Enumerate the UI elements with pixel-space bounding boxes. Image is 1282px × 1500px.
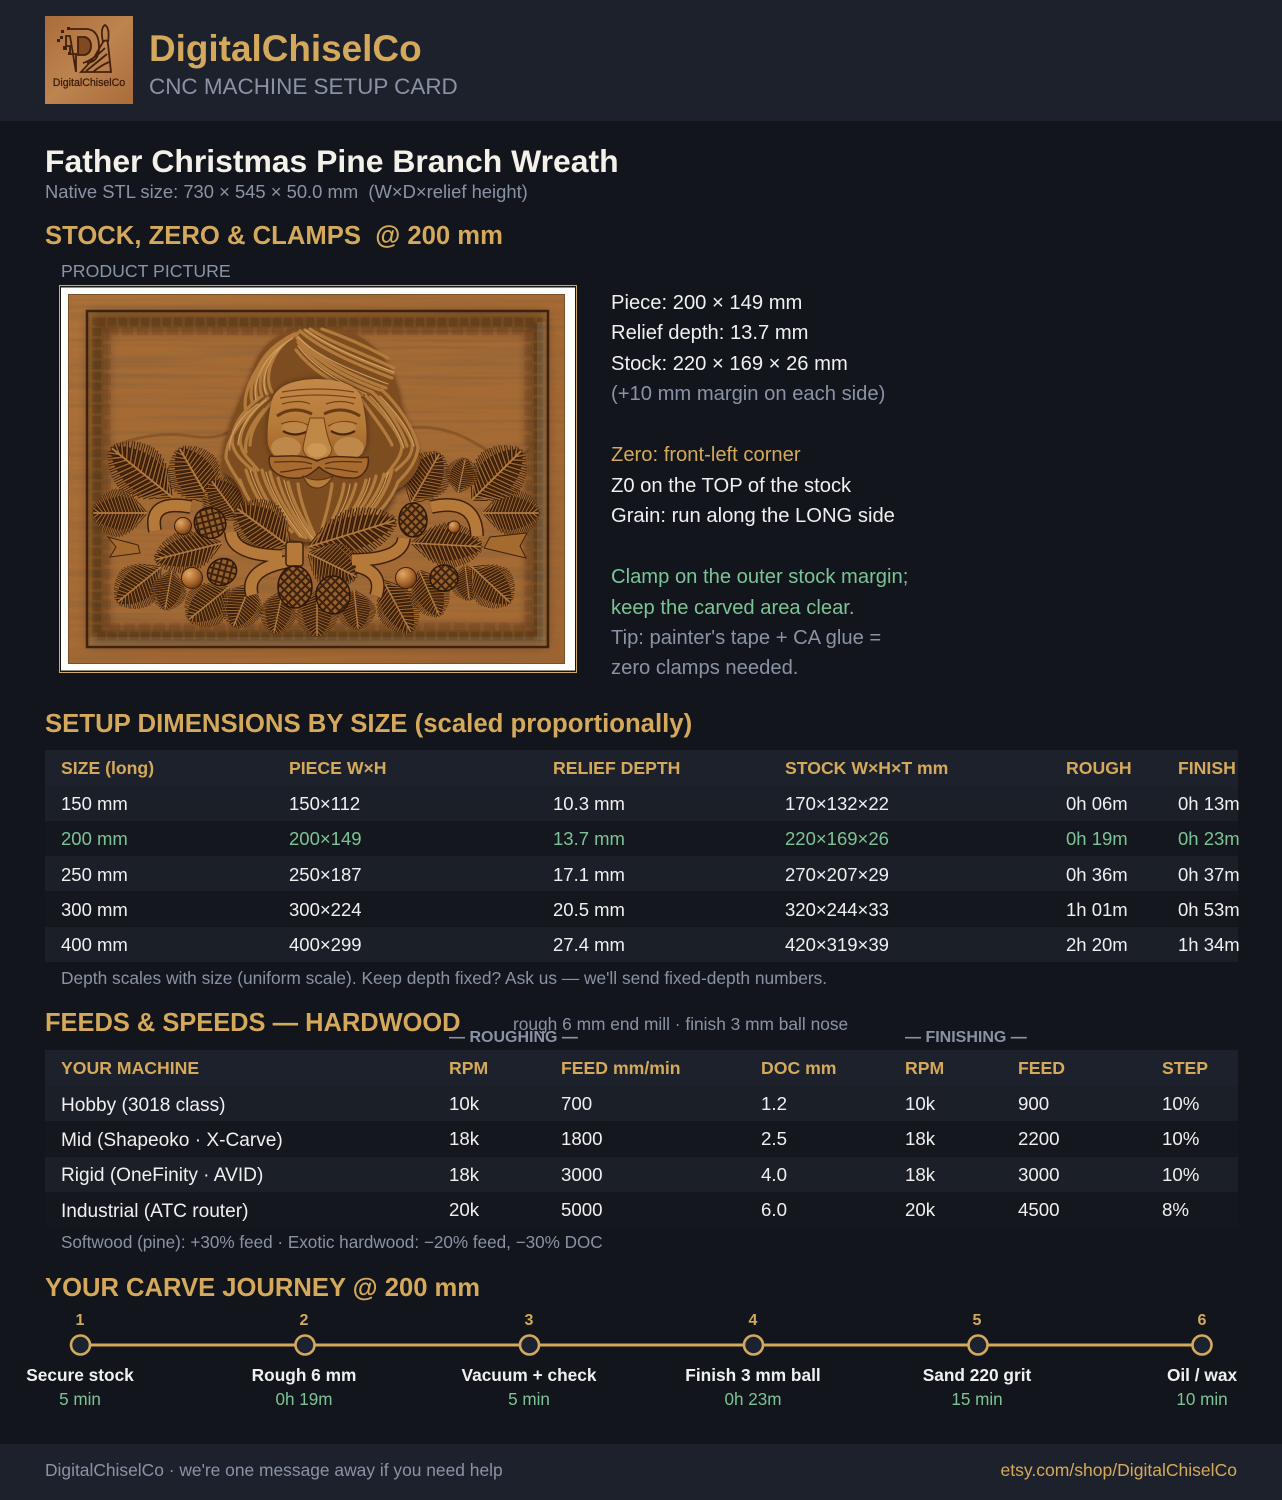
row: mid machine: 10% (1162, 1128, 1199, 1149)
row: rigid machine: 18k (905, 1164, 935, 1185)
logo: engraved wood square (45, 16, 133, 104)
row: 400 mm: 2h 20m (1066, 934, 1128, 955)
step 5: Sand 220 grit (923, 1365, 1031, 1385)
footer shop link: etsy.com/shop/DigitalChiselCo (1001, 1460, 1237, 1480)
product picture label: PRODUCT PICTURE (61, 261, 231, 281)
row: 150 mm: 170×132×22 (785, 793, 889, 814)
project title: Father Christmas Pine Branch Wreath (45, 143, 619, 179)
row: mid machine: 1800 (561, 1128, 603, 1149)
step 5: 15 min (951, 1390, 1003, 1408)
step 6 (1167, 1312, 1237, 1408)
row: mid machine: 2.5 (761, 1128, 787, 1149)
row: rigid machine: 10% (1162, 1164, 1199, 1185)
row: 250 mm: 270×207×29 (785, 864, 889, 885)
row: 250 mm: 0h 37m (1178, 864, 1240, 885)
Santa face (268, 379, 366, 463)
table header row: RELIEF DEPTH (553, 758, 680, 778)
row: 300 mm: 20.5 mm (553, 899, 625, 920)
step 1: Secure stock (26, 1365, 134, 1385)
row: 250 mm (45, 856, 1238, 891)
Santa head: hair and beard (222, 328, 420, 545)
table header row: RPM (905, 1058, 944, 1078)
row: hobby machine: 10k (905, 1093, 935, 1114)
pine branches, back layer (92, 427, 541, 643)
row: 400 mm: 420×319×39 (785, 934, 889, 955)
row: 300 mm: 1h 01m (1066, 899, 1128, 920)
pine cones (189, 502, 458, 614)
footer band (0, 1444, 1282, 1500)
step 2: 2 (300, 1312, 308, 1329)
table header row: FEED (1018, 1058, 1065, 1078)
row: rigid machine: 3000 (561, 1164, 603, 1185)
step 4: 4 (749, 1312, 757, 1329)
table header row: DOC mm (761, 1058, 836, 1078)
step 4: 0h 23m (724, 1390, 782, 1408)
step 1: 5 min (59, 1390, 101, 1408)
step 6: 6 (1198, 1312, 1206, 1329)
moustache and mouth (269, 456, 368, 488)
row: industrial machine (45, 1192, 1238, 1227)
header band (0, 0, 1282, 121)
ornaments (174, 518, 460, 588)
row: 300 mm: 300 mm (61, 899, 128, 920)
step 6: 10 min (1176, 1390, 1228, 1408)
wood board (68, 294, 565, 664)
row: industrial machine: 4500 (1018, 1199, 1060, 1220)
note: wood adjustments: Softwood (pine): +30% feed · Exotic hardwood: −20% feed, −30% DOC (61, 1233, 603, 1252)
table: setup dimensions by size (45, 750, 1240, 962)
group label: finishing: — FINISHING — (905, 1029, 1027, 1046)
row: industrial machine: 6.0 (761, 1199, 787, 1220)
row: 150 mm: 0h 06m (1066, 793, 1128, 814)
table header row (45, 750, 1238, 786)
row: industrial machine: 20k (905, 1199, 935, 1220)
row: 250 mm: 0h 36m (1066, 864, 1128, 885)
row: rigid machine: 18k (449, 1164, 479, 1185)
brand name: DigitalChiselCo (149, 28, 422, 68)
row: 200 mm highlighted (45, 821, 1238, 856)
header subtitle: CNC MACHINE SETUP CARD (149, 74, 458, 99)
row: 400 mm: 400×299 (289, 934, 362, 955)
table header row: FINISH (1178, 758, 1236, 778)
product picture: carved Santa wreath (59, 285, 577, 673)
row: 400 mm (45, 927, 1238, 962)
row: 150 mm: 10.3 mm (553, 793, 625, 814)
row: 400 mm: 400 mm (61, 934, 128, 955)
row: 150 mm: 150×112 (289, 793, 360, 814)
row: 250 mm: 250 mm (61, 864, 128, 885)
row: 150 mm: 150 mm (61, 793, 128, 814)
step 3: Vacuum + check (462, 1365, 596, 1385)
note: depth scaling: Depth scales with size (uniform scale). Keep depth fixed? Ask us — we'll send fixed-depth numbers. (61, 968, 827, 988)
row: mid machine: Mid (Shapeoko · X-Carve) (61, 1130, 283, 1151)
table header row: STEP (1162, 1058, 1208, 1078)
table header row (45, 1050, 1238, 1086)
table header row: FEED mm/min (561, 1058, 681, 1078)
row: hobby machine (45, 1086, 1238, 1121)
ribbons (108, 505, 527, 596)
step 5: 5 (973, 1312, 981, 1329)
row: 300 mm: 300×224 (289, 899, 362, 920)
row: 300 mm (45, 891, 1238, 926)
row: 300 mm: 320×244×33 (785, 899, 889, 920)
row: industrial machine: 20k (449, 1199, 479, 1220)
step 3: 5 min (508, 1390, 550, 1408)
step 4: Finish 3 mm ball (685, 1365, 821, 1385)
row: industrial machine: Industrial (ATC router) (61, 1201, 248, 1222)
picture frame (59, 285, 577, 673)
step 2: 0h 19m (275, 1390, 332, 1408)
timeline line and nodes (70, 1334, 1213, 1356)
row: 300 mm: 0h 53m (1178, 899, 1240, 920)
row: 400 mm: 1h 34m (1178, 934, 1240, 955)
row: hobby machine: 900 (1018, 1093, 1049, 1114)
tooling note: rough 6 mm end mill · finish 3 mm ball nose (513, 1014, 848, 1034)
group label: roughing: — ROUGHING — (449, 1029, 578, 1046)
row: 200 mm highlighted: 0h 19m (1066, 828, 1128, 849)
row: hobby machine: Hobby (3018 class) (61, 1095, 226, 1116)
row: 200 mm highlighted: 200×149 (289, 828, 362, 849)
table header row: STOCK W×H×T mm (785, 758, 948, 778)
row: hobby machine: 700 (561, 1093, 592, 1114)
row: industrial machine: 8% (1162, 1199, 1189, 1220)
table header row: YOUR MACHINE (61, 1058, 199, 1078)
row: rigid machine (45, 1157, 1238, 1192)
row: rigid machine: 4.0 (761, 1164, 787, 1185)
row: hobby machine: 10% (1162, 1093, 1199, 1114)
row: 150 mm: 0h 13m (1178, 793, 1240, 814)
native size line: Native STL size: 730 × 545 × 50.0 mm (W×D×relief height) (45, 181, 528, 202)
table header row: SIZE (long) (61, 758, 154, 778)
table: feeds and speeds (45, 1050, 1238, 1222)
row: hobby machine: 1.2 (761, 1093, 787, 1114)
step 2: Rough 6 mm (252, 1365, 356, 1385)
heading: stock, zero and clamps: STOCK, ZERO & CLAMPS @ 200 mm (45, 222, 503, 250)
row: 200 mm highlighted: 13.7 mm (553, 828, 625, 849)
row: 250 mm: 17.1 mm (553, 864, 625, 885)
row: rigid machine: 3000 (1018, 1164, 1060, 1185)
row: mid machine: 18k (905, 1128, 935, 1149)
row: 200 mm highlighted: 200 mm (61, 828, 128, 849)
table header row: ROUGH (1066, 758, 1132, 778)
footer message: DigitalChiselCo · we're one message away if you need help (45, 1460, 503, 1480)
row: industrial machine: 5000 (561, 1199, 603, 1220)
row: mid machine: 18k (449, 1128, 479, 1149)
row: rigid machine: Rigid (OneFinity · AVID) (61, 1165, 263, 1186)
logo: engraved wood square: DigitalChiselCo (53, 77, 125, 89)
table header row: PIECE W×H (289, 758, 387, 778)
heading: feeds and speeds: FEEDS & SPEEDS — HARDWOOD (45, 1009, 461, 1037)
row: 250 mm: 250×187 (289, 864, 362, 885)
step 5 (923, 1312, 1032, 1408)
table header row: RPM (449, 1058, 488, 1078)
pine branches, front layer (220, 486, 404, 599)
step 1 (26, 1312, 134, 1408)
step 3 (462, 1312, 596, 1408)
row: 400 mm: 27.4 mm (553, 934, 625, 955)
step 6: Oil / wax (1167, 1365, 1237, 1385)
setup instructions text block: Piece: 200 × 149 mm Relief depth: 13.7 mm Stock: 220 × 169 × 26 mm (+10 mm margin on each side) Zero: front-left corner Z0 on the TOP of the stock Grain: run along the LONG side Clamp on the outer stock margin; keep the carved area clear. Tip: painter's tape + CA glue = zero clamps needed. (611, 292, 908, 679)
step 1: 1 (76, 1312, 84, 1329)
row: mid machine (45, 1121, 1238, 1156)
row: 200 mm highlighted: 220×169×26 (785, 828, 889, 849)
row: hobby machine: 10k (449, 1093, 479, 1114)
step 2 (252, 1312, 356, 1408)
row: 200 mm highlighted: 0h 23m (1178, 828, 1240, 849)
heading: setup dimensions: SETUP DIMENSIONS BY SIZE (scaled proportionally) (45, 710, 692, 738)
heading: carve journey: YOUR CARVE JOURNEY @ 200 mm (45, 1274, 480, 1302)
row: 150 mm (45, 786, 1238, 821)
recessed panel (86, 310, 549, 648)
step 4 (685, 1312, 821, 1408)
row: mid machine: 2200 (1018, 1128, 1060, 1149)
step 3: 3 (525, 1312, 533, 1329)
